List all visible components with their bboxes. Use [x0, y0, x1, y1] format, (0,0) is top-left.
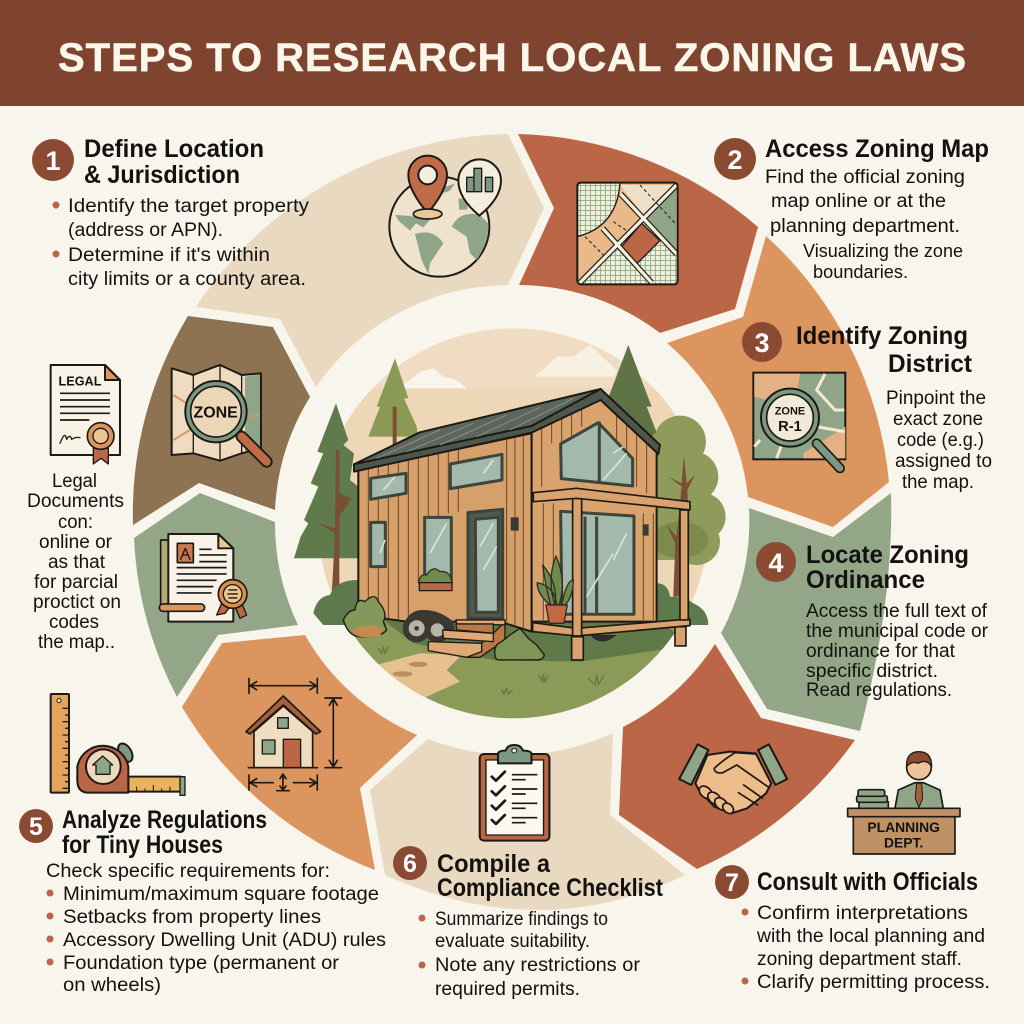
step 2 text block	[714, 135, 989, 282]
windows	[371, 423, 634, 618]
legal documents text block: online or	[39, 532, 113, 553]
step 2 text block: map online or at the	[771, 191, 946, 212]
step 1 text block: (address or APN).	[68, 220, 223, 241]
icon: document with seal	[159, 534, 247, 622]
icon: planning department official: DEPT.	[884, 835, 923, 851]
legal documents text block: proctict on	[33, 592, 121, 613]
step 5 text block: on wheels)	[63, 975, 161, 996]
bushes	[343, 597, 387, 637]
legal documents text block: the map..	[38, 632, 115, 653]
step 1 text block: Define Location	[84, 135, 264, 163]
panel: wheel segment 4 sage	[721, 493, 891, 731]
step 5 text block: Accessory Dwelling Unit (ADU) rules	[63, 930, 386, 951]
step 7 text block: Consult with Officials	[757, 868, 978, 896]
panel: wheel segment green	[134, 493, 298, 697]
step 3 text block: 3	[754, 328, 770, 358]
step 6 text block: evaluate suitability.	[435, 931, 590, 952]
step 4 text block: the municipal code or	[806, 621, 989, 642]
icon: zone R-1 magnifier: ZONE	[775, 405, 805, 417]
step 4 text block: Locate Zoning	[806, 541, 969, 569]
step 2 text block: Find the official zoning	[765, 167, 965, 188]
legal documents text block: codes	[49, 612, 99, 633]
step 5 text block: Check specific requirements for:	[46, 861, 330, 882]
step 3 text block: Pinpoint the	[886, 388, 986, 409]
step 7 text block: zoning department staff.	[757, 949, 962, 970]
step 4 text block: Access the full text of	[806, 601, 988, 622]
icon: ruler and tape measure	[51, 694, 185, 795]
step 4 text block: ordinance for that	[806, 641, 956, 662]
step 3 text block: District	[888, 350, 973, 378]
step 1 text block	[32, 135, 310, 290]
trees	[294, 345, 726, 625]
title banner: STEPS TO RESEARCH LOCAL ZONING LAWS	[58, 36, 966, 80]
step 7 text block: Clarify permitting process.	[757, 972, 990, 993]
step 5 text block	[19, 806, 386, 996]
trailer wheels	[403, 610, 455, 643]
step 1 text block: & Jurisdiction	[84, 161, 240, 189]
step 3 text block: Identify Zoning	[796, 322, 968, 350]
step 5 text block: Foundation type (permanent or	[63, 953, 340, 974]
central tiny house illustration	[294, 327, 726, 720]
step 6 text block: Compile a	[437, 850, 551, 878]
step 7 text block: Confirm interpretations	[757, 903, 968, 924]
step 1 text block: Identify the target property	[68, 196, 310, 217]
step 5 text block: Analyze Regulations	[62, 806, 267, 834]
lanterns	[511, 517, 519, 531]
step 2 text block: planning department.	[770, 216, 960, 237]
step 5 text block: 5	[29, 813, 43, 841]
house walls	[358, 433, 532, 632]
step 4 text block: 4	[768, 548, 784, 578]
icon: planning department official: PLANNING	[867, 819, 940, 835]
panel: wheel segment brown	[133, 316, 310, 525]
icon: planning department official	[848, 752, 960, 854]
step 1 text block: city limits or a county area.	[68, 269, 306, 290]
step 3 text block: code (e.g.)	[897, 430, 984, 451]
step 5 text block: Minimum/maximum square footage	[63, 884, 379, 905]
step 4 text block: Read regulations.	[806, 680, 952, 701]
icon: clipboard checklist	[480, 745, 549, 841]
step 4 text block: Ordinance	[806, 566, 925, 594]
step 2 text block: 2	[727, 145, 743, 175]
panel: wheel segment 2 terracotta	[518, 134, 758, 333]
step 1 text block: Determine if it's within	[68, 245, 270, 266]
step 7 text block: 7	[725, 869, 739, 897]
window box	[419, 569, 452, 583]
step 2 text block: Access Zoning Map	[765, 135, 989, 163]
step 3 text block: assigned to	[895, 451, 992, 472]
step 6 text block	[393, 846, 664, 1000]
step 6 text block: Note any restrictions or	[435, 955, 641, 976]
roof	[354, 389, 601, 464]
icon: zoning map	[577, 183, 678, 284]
step 6 text block: 6	[403, 850, 417, 878]
legal documents text block: as that	[48, 552, 106, 573]
legal documents text block: Documents	[27, 491, 124, 512]
icon: legal document: LEGAL	[59, 375, 102, 389]
icon: globe with location pins	[389, 156, 501, 277]
step 2 text block: Visualizing the zone	[803, 241, 963, 261]
panel: wheel segment 6 beige	[370, 733, 685, 910]
icon: zone R-1 magnifier	[753, 373, 845, 468]
step 7 text block: with the local planning and	[756, 926, 985, 947]
panel: wheel segment 1 beige	[196, 134, 544, 387]
panel: wheel segment 3 orange	[667, 236, 889, 527]
title banner	[0, 0, 1024, 106]
steps	[428, 620, 505, 657]
step 1 text block: 1	[45, 146, 61, 176]
potted plant	[537, 556, 573, 623]
step 4 text block	[756, 541, 989, 701]
legal documents text block: for parcial	[34, 572, 118, 593]
step 6 text block: Summarize findings to	[435, 909, 608, 930]
step 6 text block: Compliance Checklist	[437, 874, 664, 902]
step 5 text block: Setbacks from property lines	[63, 907, 321, 928]
legal documents text block: Legal	[52, 471, 97, 492]
step 3 text block: the map.	[902, 472, 974, 493]
icon: house with dimensions	[246, 678, 342, 791]
legal documents text block	[27, 471, 124, 653]
icon: zone R-1 magnifier: R-1	[778, 419, 802, 435]
porch	[590, 635, 617, 642]
step 4 text block: specific district.	[806, 661, 938, 682]
step 2 text block: boundaries.	[813, 262, 908, 282]
step 3 text block: exact zone	[893, 409, 983, 430]
panel: wheel segment 7 terracotta	[619, 644, 855, 869]
icon: handshake	[679, 744, 787, 816]
step 7 text block	[715, 865, 990, 993]
legal documents text block: con:	[58, 512, 93, 533]
step 5 text block: for Tiny Houses	[62, 831, 223, 859]
icon: zone map magnifier	[172, 365, 267, 462]
icon: legal document	[51, 365, 120, 464]
step 6 text block: required permits.	[435, 979, 580, 1000]
panel: wheel segment 5 orange	[182, 635, 417, 870]
step 3 text block	[742, 322, 992, 493]
icon: zone map magnifier: ZONE	[193, 405, 238, 422]
